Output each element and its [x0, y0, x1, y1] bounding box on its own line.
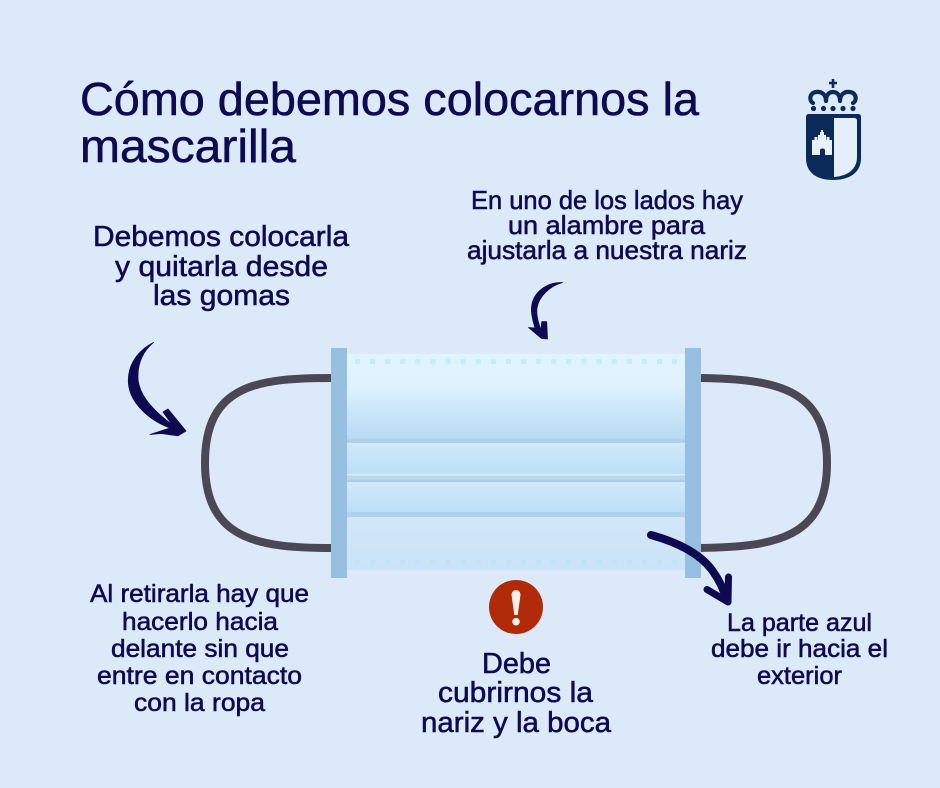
text: nose wire: ajustarla a nuestra nariz: [467, 235, 747, 265]
text: cover nose and mouth: [421, 648, 611, 739]
icon: regional coat of arms: [806, 79, 861, 180]
right side band: [685, 348, 701, 578]
text: blue side outward: exterior: [757, 662, 842, 690]
arrow: to the nose wire: [528, 282, 562, 339]
left side band: [331, 348, 347, 578]
text: removing forward: con la ropa: [134, 689, 265, 717]
mask upper panel: [347, 354, 685, 441]
mask folds: [347, 439, 685, 517]
text: remove by the straps: las gomas: [153, 280, 290, 312]
mask ear loop: right: [699, 378, 827, 548]
text: cover nose and mouth: nariz y la boca: [421, 707, 611, 739]
text: remove by the straps: y quitarla desde: [115, 251, 328, 283]
stitching dots: [355, 359, 677, 564]
title: [80, 73, 699, 172]
text: cover nose and mouth: cubrirnos la: [438, 677, 593, 709]
arrow: to the blue side: [651, 535, 728, 602]
surgical mask: [331, 348, 701, 578]
text: removing forward: delante sin que: [111, 635, 289, 663]
text: remove by the straps: Debemos colocarla: [93, 221, 349, 253]
title: Cómo debemos colocarnos la: [80, 73, 699, 125]
mask ear loop: left: [205, 378, 333, 548]
icon: warning: [489, 580, 543, 634]
text: nose wire: En uno de los lados hay: [471, 185, 743, 215]
text: blue side outward: La parte azul: [727, 609, 872, 637]
mask lower panel: [347, 517, 685, 570]
text: removing forward: hacerlo hacia: [122, 608, 278, 636]
text: removing forward: [90, 580, 309, 717]
text: blue side outward: debe ir hacia el: [711, 635, 888, 663]
text: removing forward: entre en contacto: [97, 662, 302, 690]
text: removing forward: Al retirarla hay que: [90, 580, 309, 608]
text: blue side outward: [711, 609, 888, 690]
text: nose wire: [467, 185, 747, 265]
text: cover nose and mouth: Debe: [482, 648, 551, 680]
title: mascarilla: [80, 120, 296, 172]
arrow: to the ear strap: [128, 342, 186, 436]
text: remove by the straps: [93, 221, 349, 312]
text: nose wire: un alambre para: [508, 210, 706, 240]
